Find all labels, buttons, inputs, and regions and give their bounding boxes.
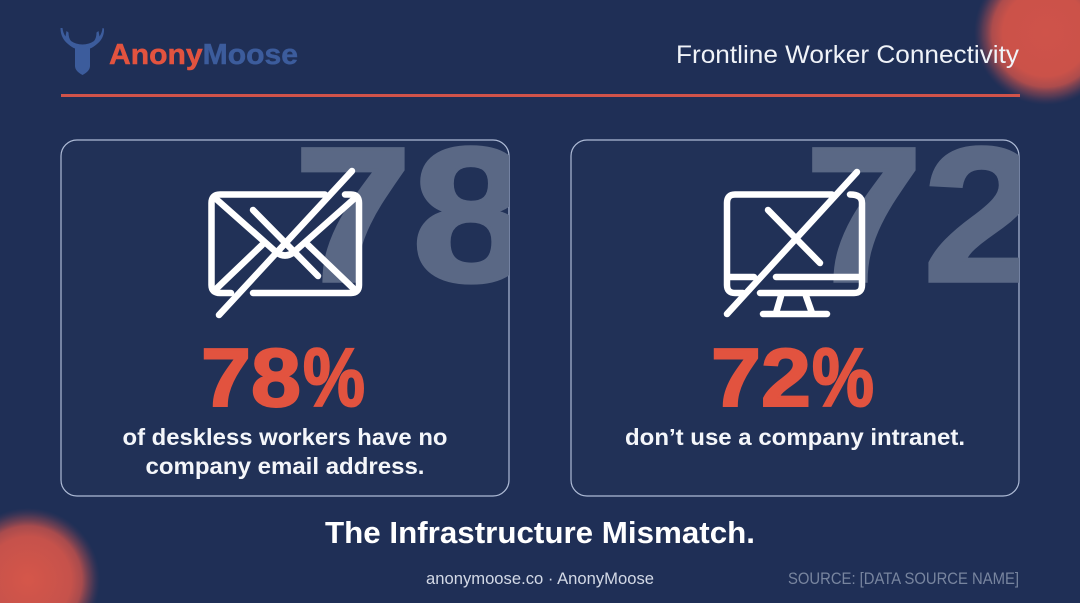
- logo: [60, 28, 298, 75]
- glow: top right: [970, 0, 1080, 108]
- stat 72%: %: [812, 331, 874, 424]
- stat 78%: [201, 331, 365, 424]
- icon: crossed out envelope: [212, 171, 359, 315]
- watermark number 72: 72: [805, 107, 1041, 322]
- stat 78%: 78: [201, 331, 301, 424]
- footer source: SOURCE: [DATA SOURCE NAME]: [788, 570, 1019, 588]
- icon: moose: [60, 28, 104, 75]
- panel: intranet: [570, 139, 1020, 497]
- description: don’t use a company intranet.: [625, 424, 965, 450]
- icon: crossed out monitor: [727, 172, 862, 314]
- glow: bottom left: [0, 505, 104, 603]
- watermark number 78: 78: [294, 107, 530, 322]
- description: company email address.: [146, 453, 424, 479]
- header rule: [61, 94, 1020, 97]
- footer site: anonymoose.co · AnonyMoose: [426, 569, 654, 588]
- description: [122, 424, 448, 479]
- stat 72%: 72: [711, 331, 811, 424]
- stat 72%: [711, 331, 874, 424]
- headline: The Infrastructure Mismatch.: [325, 515, 755, 550]
- header title: Frontline Worker Connectivity: [676, 41, 1020, 69]
- description: of deskless workers have no: [122, 424, 448, 450]
- logo wordmark: AnonyMoose: [109, 39, 298, 71]
- panel: email: [60, 139, 510, 497]
- stat 78%: %: [303, 331, 365, 424]
